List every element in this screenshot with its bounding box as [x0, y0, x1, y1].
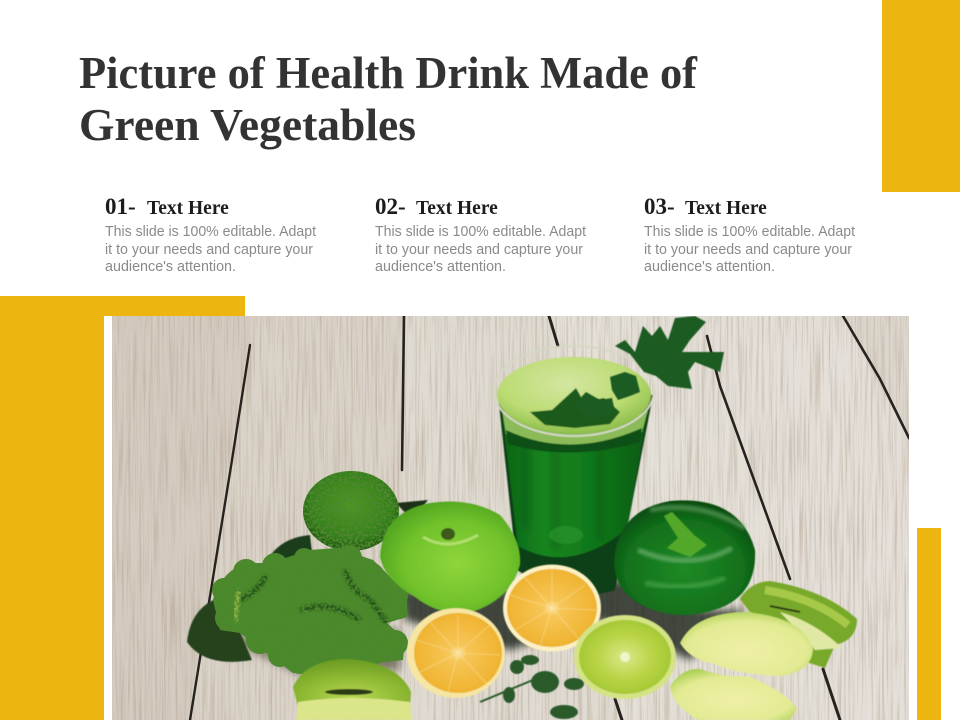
- body 02: it to your needs and capture your: [375, 242, 583, 258]
- heading 01: Text Here: [147, 198, 229, 219]
- title: [79, 48, 698, 150]
- title: Green Vegetables: [79, 100, 416, 150]
- apple: [380, 502, 520, 613]
- photo: green drink and vegetables on wooden table: [112, 316, 909, 720]
- lime slice: [574, 615, 676, 699]
- body 02: This slide is 100% editable. Adapt: [375, 224, 586, 240]
- body 01: [105, 224, 316, 275]
- kiwi right: [740, 581, 857, 668]
- green pepper: [614, 500, 755, 615]
- cut apple: two halves: [670, 612, 813, 720]
- text block 03: [644, 194, 855, 275]
- body 01: it to your needs and capture your: [105, 242, 313, 258]
- lemon half: upper: [503, 564, 601, 652]
- yellow block: left L-shape: [0, 296, 245, 720]
- herb in drink: [530, 388, 620, 428]
- heading 03: 03-: [644, 194, 675, 219]
- broccoli: [212, 545, 408, 674]
- body 03: audience's attention.: [644, 259, 775, 275]
- body 02: [375, 224, 586, 275]
- heading 03: Text Here: [685, 198, 767, 219]
- shadows under produce: [230, 580, 745, 675]
- heading 02: Text Here: [416, 198, 498, 219]
- heading 01: 01-: [105, 194, 136, 219]
- lemon half: lower: [407, 608, 505, 698]
- yellow bar: bottom right: [917, 528, 941, 720]
- yellow block: top right: [882, 0, 960, 192]
- body 03: This slide is 100% editable. Adapt: [644, 224, 855, 240]
- text block 02: [375, 194, 586, 275]
- dark green lime: [303, 471, 399, 551]
- kiwi left: [293, 659, 412, 720]
- dark leaves behind broccoli: [187, 500, 428, 662]
- body 03: it to your needs and capture your: [644, 242, 852, 258]
- body 01: This slide is 100% editable. Adapt: [105, 224, 316, 240]
- glass of green juice: [494, 346, 654, 594]
- mint sprig: [480, 655, 584, 719]
- title: Picture of Health Drink Made of: [79, 48, 698, 98]
- wood table: [112, 316, 909, 720]
- text block 01: [105, 194, 316, 275]
- body 02: audience's attention.: [375, 259, 506, 275]
- body 03: [644, 224, 855, 275]
- body 01: audience's attention.: [105, 259, 236, 275]
- parsley garnish: [580, 316, 725, 408]
- heading 02: 02-: [375, 194, 406, 219]
